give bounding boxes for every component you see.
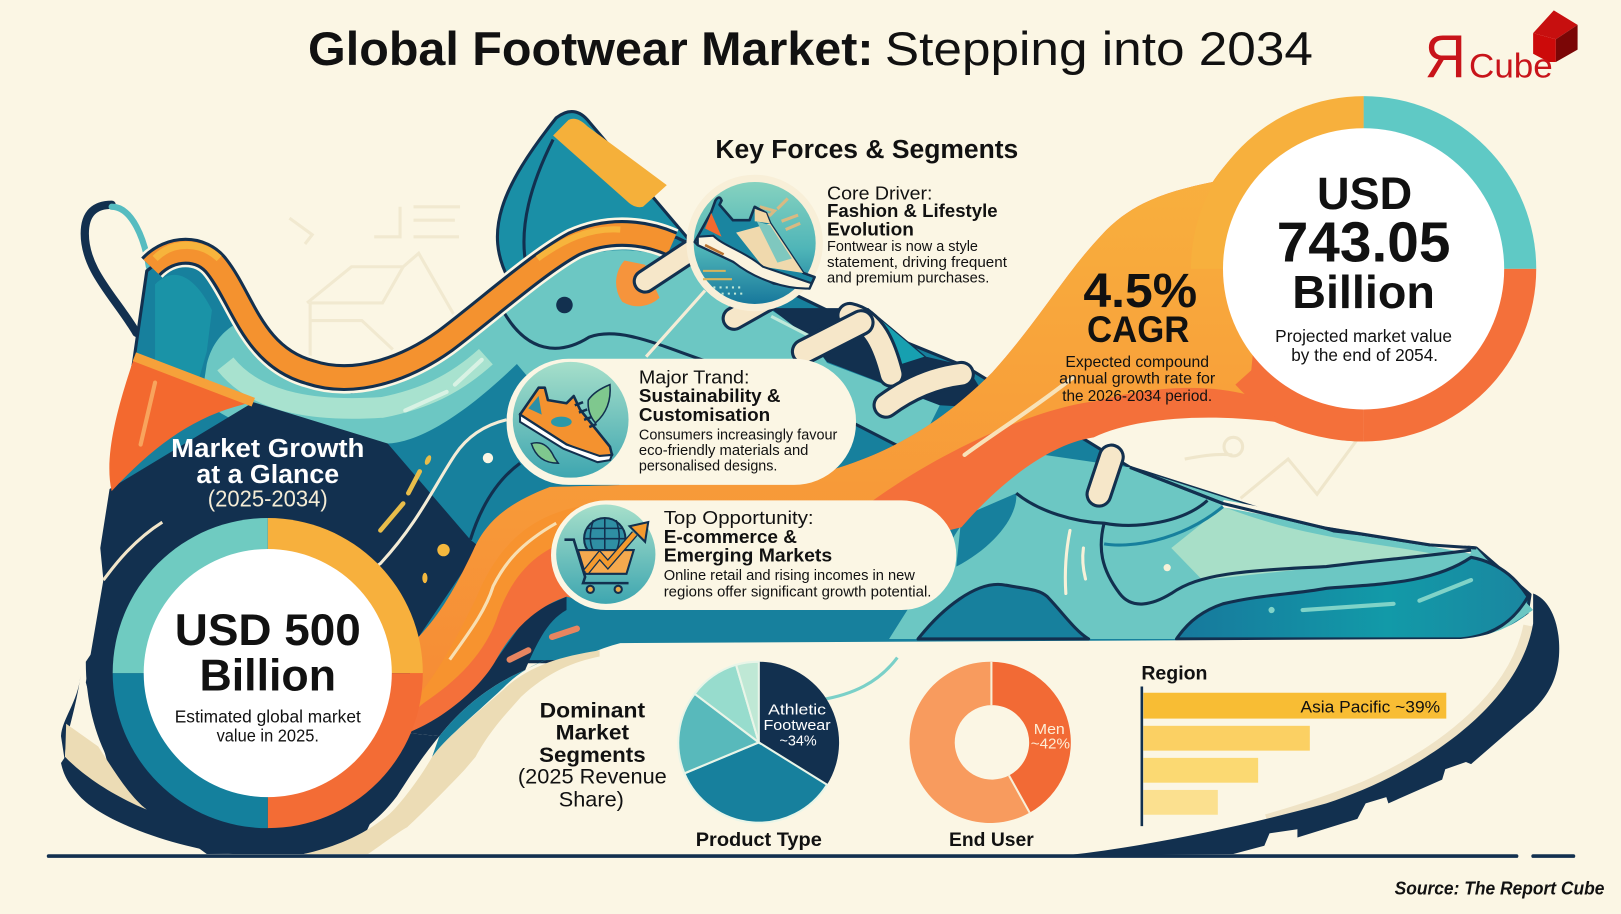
major trend text: Major Trand: bbox=[639, 367, 750, 388]
start value ring bbox=[113, 518, 423, 828]
heading: market growth bbox=[171, 435, 364, 512]
end value text: by the end of 2054. bbox=[1291, 345, 1438, 365]
start value text: Billion bbox=[200, 652, 336, 701]
CAGR text: CAGR bbox=[1087, 308, 1190, 350]
heading: dominant segments: (2025 Revenue bbox=[518, 764, 667, 789]
end value ring bbox=[1191, 96, 1536, 441]
top opportunity text: Emerging Markets bbox=[664, 544, 832, 565]
shoe forefoot bbox=[889, 455, 1533, 639]
top opportunity text: regions offer significant growth potential. bbox=[664, 584, 931, 601]
swoosh ribbon bbox=[398, 97, 1364, 733]
top opportunity text: E-commerce & bbox=[664, 526, 797, 547]
start value text: value in 2025. bbox=[217, 725, 319, 745]
pie label: Footwear bbox=[763, 718, 831, 734]
start value text: Estimated global market bbox=[175, 707, 361, 727]
core driver text: and premium purchases. bbox=[827, 269, 989, 286]
end value text: 743.05 bbox=[1277, 212, 1450, 275]
logo: Cube bbox=[1469, 48, 1553, 86]
top opportunity text: Top Opportunity: bbox=[664, 507, 814, 528]
heading: dominant segments: Dominant bbox=[540, 698, 645, 723]
end value text: USD bbox=[1317, 168, 1412, 219]
CAGR text: Expected compound bbox=[1065, 353, 1209, 371]
title: Stepping into 2034 bbox=[885, 23, 1313, 76]
top opportunity text bbox=[664, 507, 931, 601]
icon: core driver shoe bbox=[686, 175, 823, 311]
end value text: Billion bbox=[1292, 266, 1435, 318]
source note: Source: The Report Cube bbox=[1395, 877, 1604, 898]
core driver text: statement, driving frequent bbox=[827, 254, 1008, 271]
heading: dominant segments: Segments bbox=[539, 742, 646, 767]
heading: market growth: at a Glance bbox=[196, 461, 339, 489]
left sole wrap bbox=[61, 620, 439, 854]
heading: dominant segments: Share) bbox=[559, 786, 624, 811]
heading: key forces: Key Forces & Segments bbox=[715, 136, 1018, 164]
panel: major trend bbox=[507, 359, 856, 485]
bar chart: region bbox=[1141, 662, 1446, 826]
title bbox=[308, 23, 1313, 76]
core driver text bbox=[827, 183, 1008, 286]
pie label bbox=[763, 702, 831, 749]
major trend text bbox=[639, 367, 837, 474]
donut label bbox=[1031, 721, 1070, 753]
shoe throat bbox=[770, 308, 992, 408]
outsole bbox=[1068, 593, 1559, 855]
start value text bbox=[175, 606, 361, 745]
end value text: Projected market value bbox=[1275, 326, 1452, 346]
major trend text: Customisation bbox=[639, 404, 770, 425]
core driver text: Evolution bbox=[827, 219, 914, 240]
CAGR text: the 2026-2034 period. bbox=[1062, 387, 1212, 405]
bar chart: region: Asia Pacific ~39% bbox=[1301, 697, 1440, 716]
end value text bbox=[1275, 168, 1452, 365]
title: Global Footwear Market: bbox=[308, 23, 874, 76]
lower upper panels bbox=[407, 597, 577, 736]
donut label: ~42% bbox=[1031, 736, 1070, 753]
logo bbox=[1425, 10, 1578, 91]
core driver text: Fontwear is now a style bbox=[827, 238, 978, 255]
pie label: Athletic bbox=[768, 702, 826, 718]
shoe upper bbox=[103, 223, 1530, 662]
shoe tongue bbox=[497, 112, 715, 279]
logo: Я bbox=[1425, 24, 1466, 91]
CAGR text: annual growth rate for bbox=[1059, 370, 1216, 388]
icon: shoe pull loop bbox=[85, 205, 149, 333]
caption: end user: End User bbox=[949, 829, 1034, 851]
heading: dominant segments: Market bbox=[556, 719, 629, 744]
shoe collar band bbox=[151, 229, 672, 378]
midsole bbox=[304, 610, 1533, 854]
CAGR text bbox=[1059, 264, 1216, 405]
donut chart: end user bbox=[910, 662, 1071, 823]
major trend text: Consumers increasingly favour bbox=[639, 426, 837, 443]
bar chart: region: Region bbox=[1141, 662, 1207, 684]
major trend text: eco-friendly materials and bbox=[639, 442, 808, 459]
icon: sustainable shoe bbox=[513, 362, 629, 478]
heading: dominant segments bbox=[518, 698, 667, 811]
CAGR text: 4.5% bbox=[1083, 264, 1197, 318]
heading: market growth: Market Growth bbox=[171, 435, 364, 463]
donut label: Men bbox=[1034, 721, 1065, 738]
icon: cart with globe bbox=[556, 505, 655, 604]
core driver text: Core Driver: bbox=[827, 183, 932, 204]
connector lines bbox=[357, 291, 705, 580]
shoe laces bbox=[645, 251, 1111, 494]
pie chart: product type bbox=[678, 662, 839, 823]
pie connector curve bbox=[820, 658, 897, 700]
heading: market growth: (2025-2034) bbox=[208, 486, 328, 512]
pie label: ~34% bbox=[779, 733, 817, 749]
panel: top opportunity bbox=[551, 500, 956, 610]
start value text: USD 500 bbox=[175, 606, 361, 655]
core driver text: Fashion & Lifestyle bbox=[827, 200, 998, 221]
major trend text: personalised designs. bbox=[639, 457, 777, 474]
caption: product type: Product Type bbox=[696, 829, 822, 851]
ground line bbox=[49, 854, 1573, 858]
heel panel bbox=[86, 357, 493, 854]
top opportunity text: Online retail and rising incomes in new bbox=[664, 567, 915, 584]
major trend text: Sustainability & bbox=[639, 385, 781, 406]
